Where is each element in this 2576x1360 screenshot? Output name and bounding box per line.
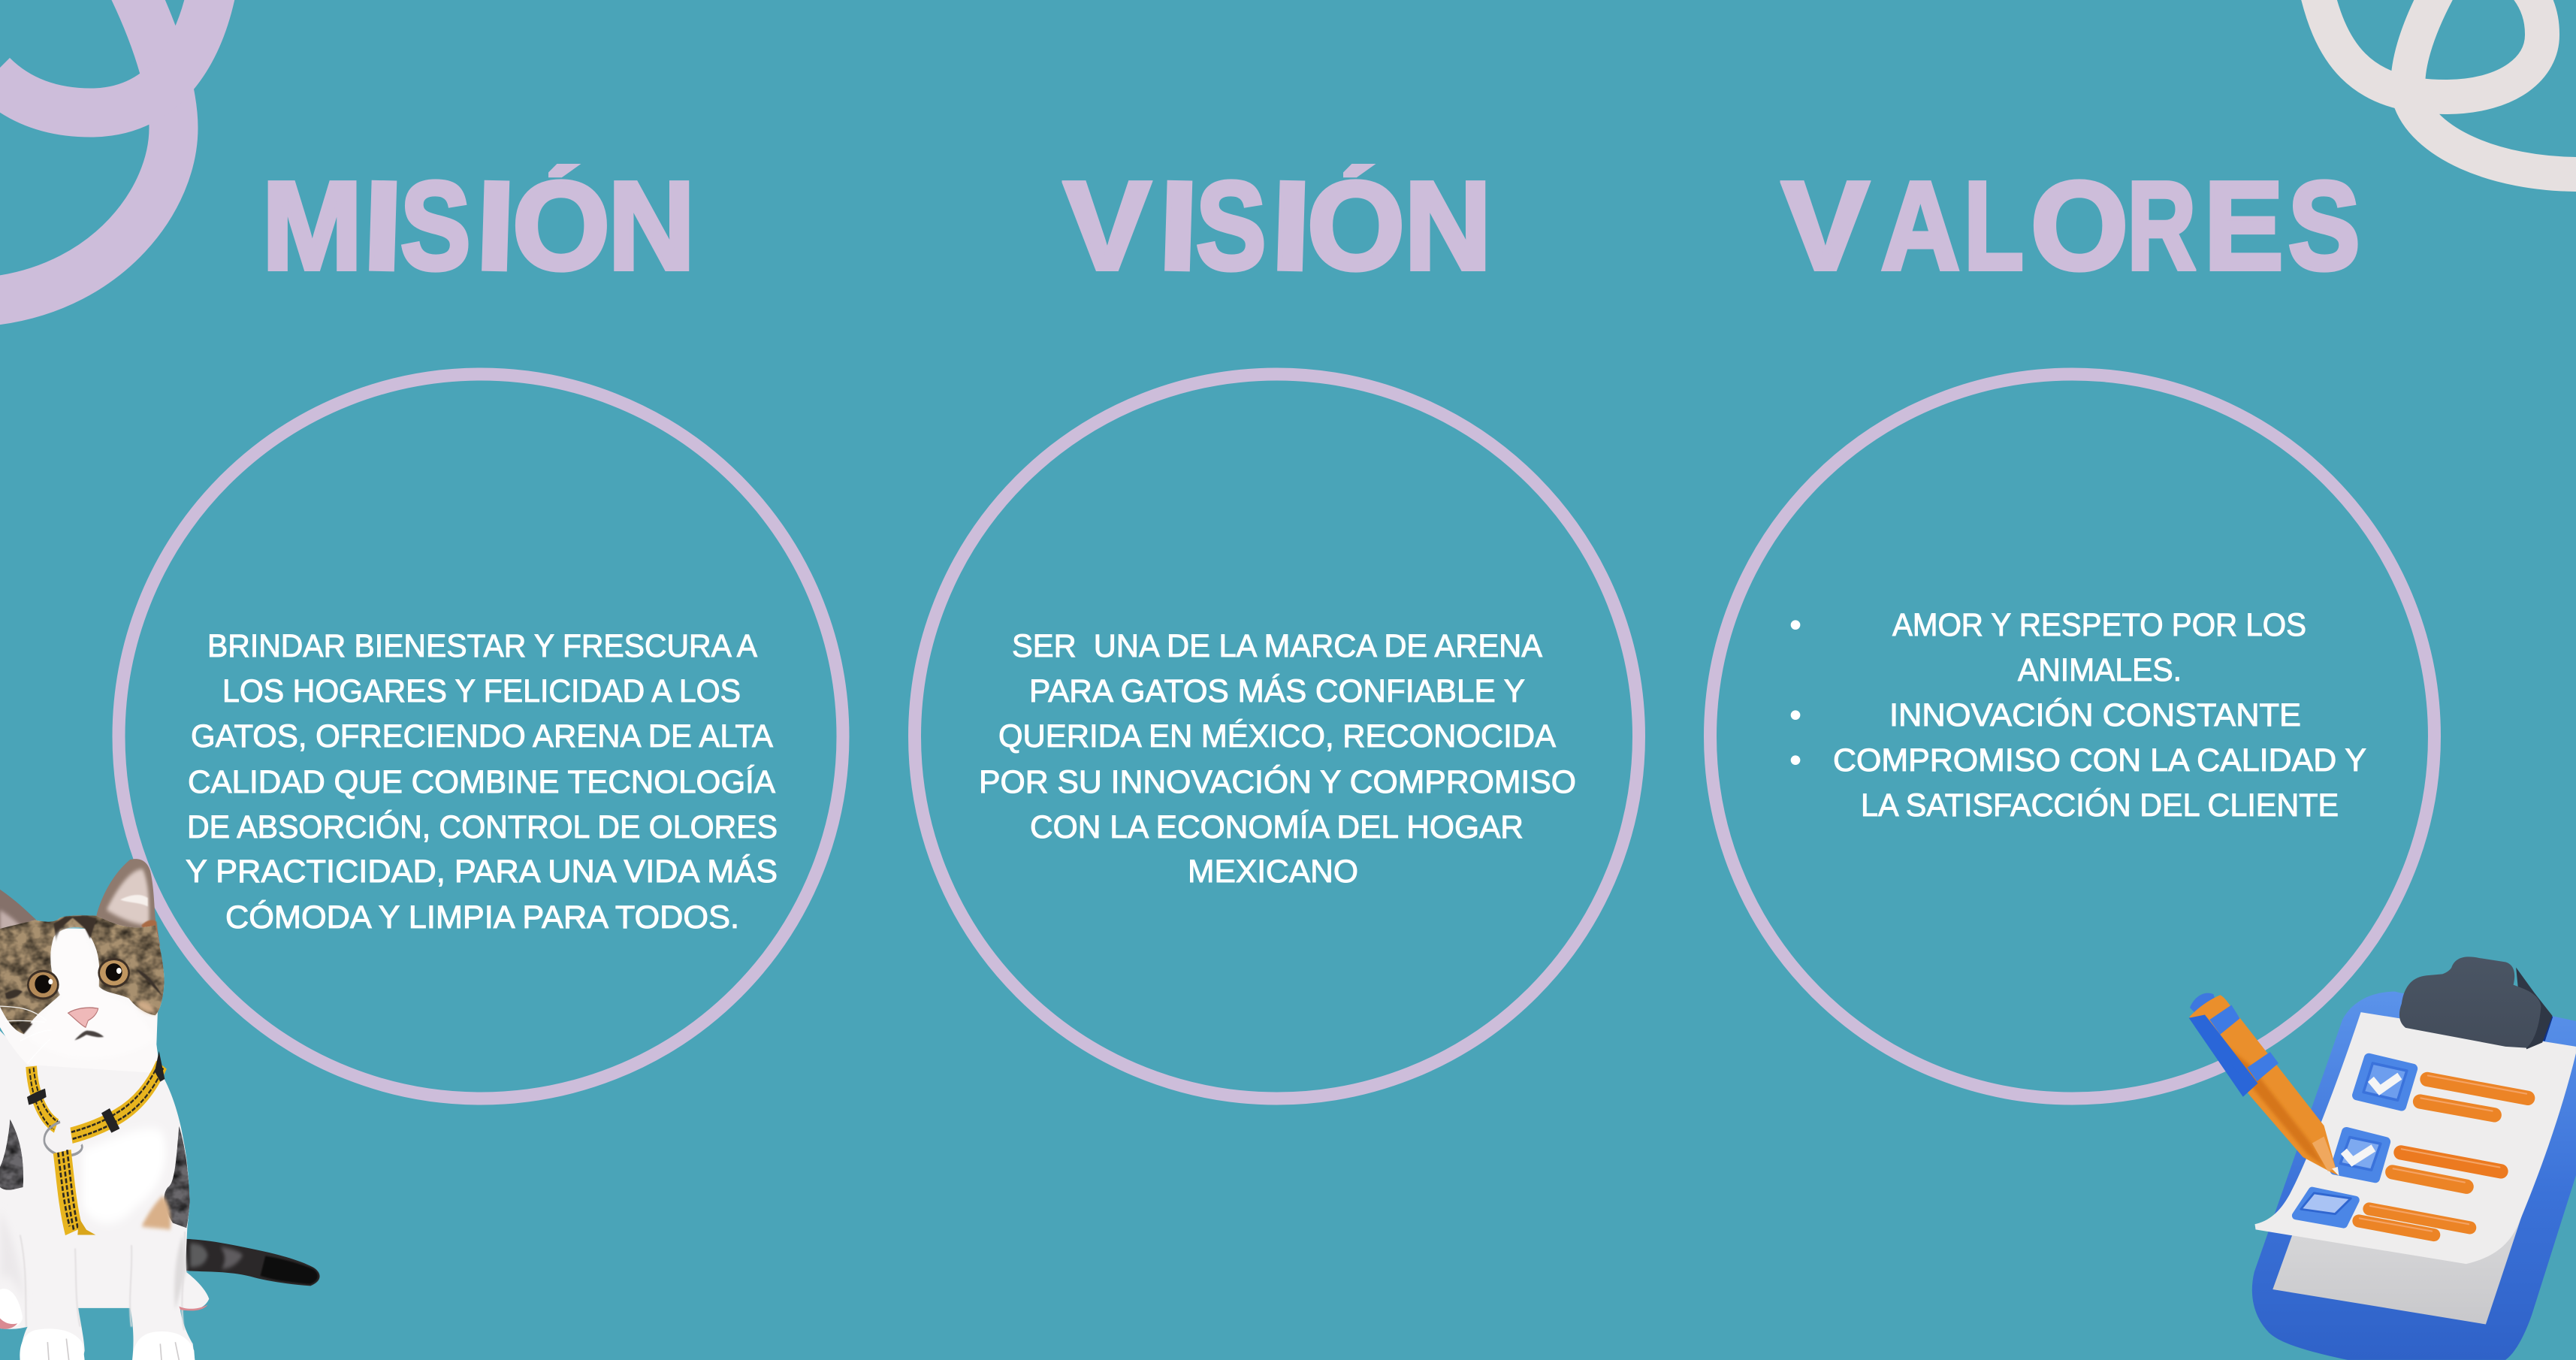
whiskers [0, 1006, 51, 1063]
panel: valores [1710, 164, 2434, 1099]
text block: valores list: • [1789, 742, 1801, 778]
circle outline: visión [915, 374, 1639, 1099]
text block: valores list: COMPROMISO CON LA CALIDAD Y [1833, 742, 2366, 778]
illustration: clipboard checklist with pen [2189, 957, 2576, 1360]
nose [68, 1008, 98, 1027]
muzzle [29, 929, 155, 1059]
clipboard board [2252, 992, 2576, 1360]
text block: visión: PARA GATOS MÁS CONFIABLE Y [1029, 673, 1525, 709]
checkbox: checked one [2357, 1058, 2413, 1106]
paws [0, 1289, 208, 1360]
text block: visión: CON LA ECONOMÍA DEL HOGAR [1030, 809, 1524, 845]
pen [2189, 993, 2339, 1176]
heading: VISIÓN [1052, 164, 1495, 284]
text block: visión: POR SU INNOVACIÓN Y COMPROMISO [979, 764, 1576, 800]
decorative swirl: top left [0, 0, 214, 301]
heading: VALORES [1765, 164, 2374, 284]
panel: visión [915, 164, 1639, 1099]
orange text bars [2359, 1075, 2528, 1235]
mouth [74, 1031, 104, 1040]
left ear [0, 890, 40, 978]
checkbox: checked two [2335, 1132, 2386, 1178]
decorative swirl: top right [2314, 0, 2576, 174]
chest fur highlight [83, 1129, 166, 1223]
checkbox: empty [2296, 1191, 2356, 1224]
top checklist sheet [2254, 1012, 2576, 1264]
text block: valores list: • [1789, 697, 1801, 733]
illustration: kitten with yellow harness [0, 859, 320, 1360]
text block: visión: SER UNA DE LA MARCA DE ARENA [1012, 628, 1542, 664]
text block: misión [186, 628, 778, 935]
harness [29, 1063, 163, 1232]
text block: valores list: INNOVACIÓN CONSTANTE [1889, 697, 2301, 733]
heading: MISIÓN [255, 164, 699, 284]
body [0, 1031, 209, 1360]
circle outline: valores [1710, 374, 2434, 1099]
head white base [0, 929, 160, 1073]
text block: valores list: LA SATISFACCIÓN DEL CLIENTE [1861, 787, 2339, 824]
text block: misión: Y PRACTICIDAD, PARA UNA VIDA MÁS [186, 854, 778, 890]
text block: misión: CALIDAD QUE COMBINE TECNOLOGÍA [188, 764, 775, 800]
clip [2399, 957, 2553, 1049]
text block: visión: MEXICANO [1188, 854, 1358, 890]
orange flank patch [141, 1195, 171, 1230]
text block: misión: BRINDAR BIENESTAR Y FRESCURA A [207, 628, 757, 664]
text block: valores list [1789, 607, 2366, 824]
head markings: brown tabby [0, 915, 165, 1034]
harness sliders [27, 1051, 165, 1133]
text block: misión: CÓMODA Y LIMPIA PARA TODOS. [225, 899, 739, 935]
text block: misión: GATOS, OFRECIENDO ARENA DE ALTA [191, 718, 773, 754]
lower sheets [2272, 1154, 2542, 1324]
right eye [98, 958, 130, 988]
tail [186, 1239, 320, 1286]
body shading [0, 1211, 186, 1310]
text block: valores list: • [1789, 607, 1801, 643]
text block: valores list: ANIMALES. [2018, 652, 2182, 688]
harness tip [77, 1218, 95, 1235]
flank markings [0, 1119, 190, 1228]
text block: visión: QUERIDA EN MÉXICO, RECONOCIDA [998, 718, 1556, 754]
text block: misión: LOS HOGARES Y FELICIDAD A LOS [222, 673, 741, 709]
front leg outlines [20, 1232, 185, 1330]
text block: misión: DE ABSORCIÓN, CONTROL DE OLORES [187, 809, 778, 845]
panel: misión [119, 164, 843, 1099]
text block: visión [979, 628, 1576, 890]
right ear [96, 859, 160, 946]
circle outline: misión [119, 374, 843, 1099]
left eye [27, 970, 59, 1000]
text block: valores list: AMOR Y RESPETO POR LOS [1892, 607, 2306, 643]
